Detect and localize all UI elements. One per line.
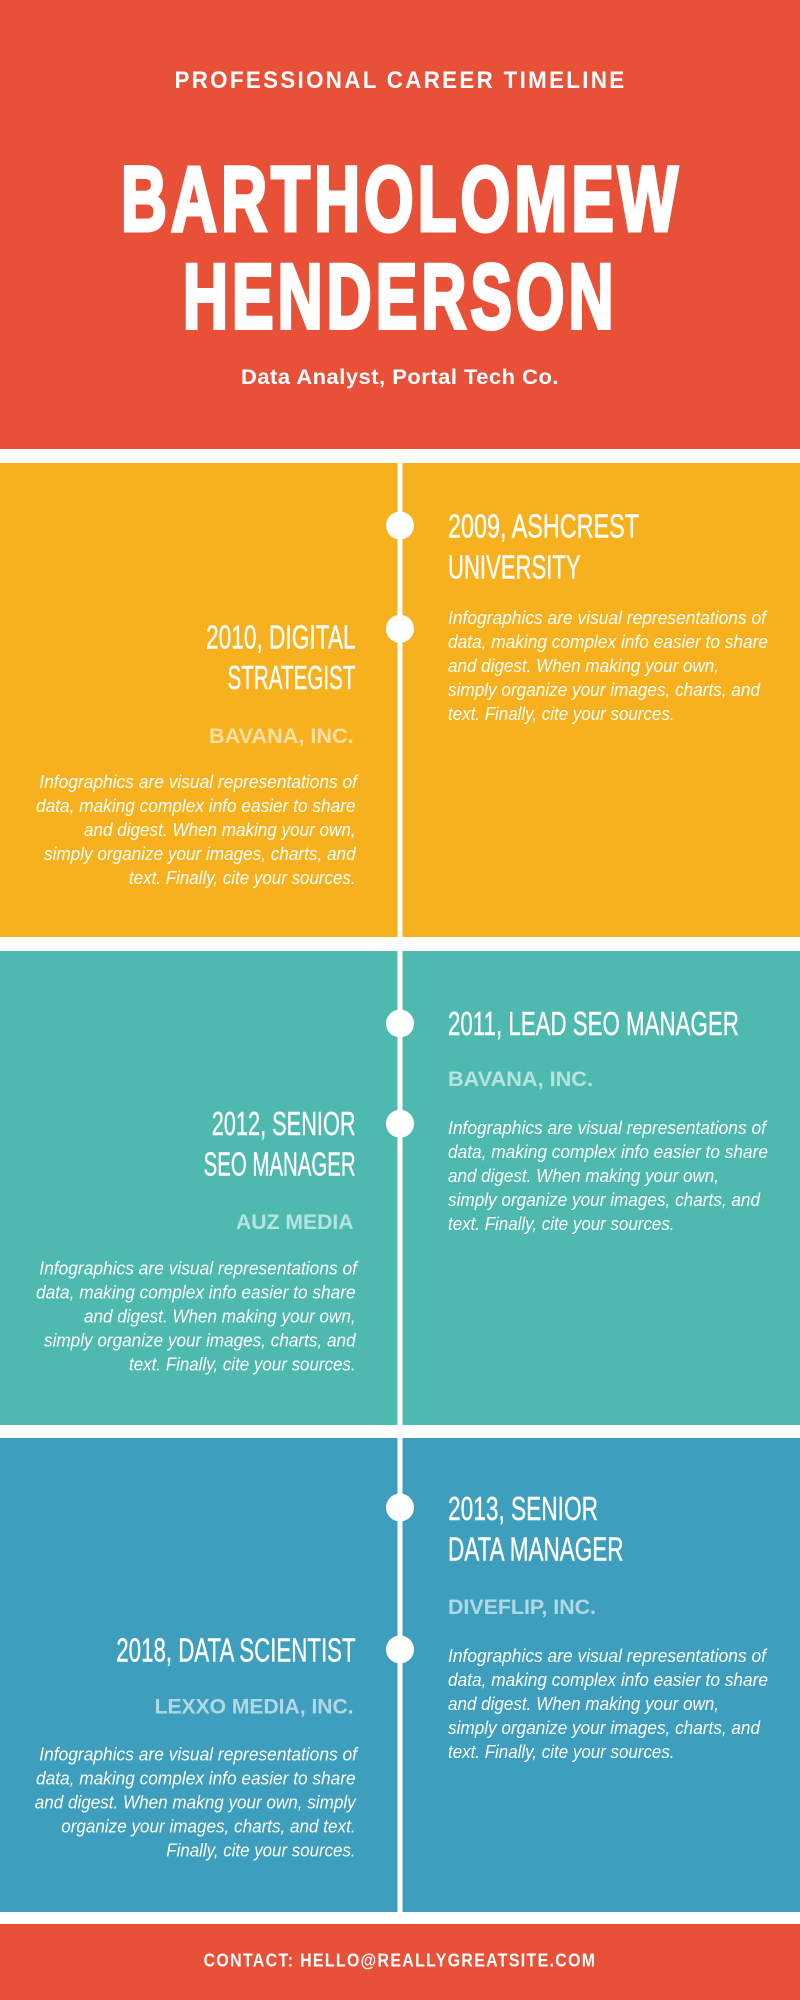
panel: teal timeline section bbox=[0, 951, 800, 1425]
entry: 2011 Lead SEO Manager: BAVANA, INC. bbox=[448, 1068, 593, 1091]
entry: 2010 Digital Strategist: and digest. When making your own, bbox=[84, 819, 356, 840]
entry: 2018 Data Scientist: organize your images, charts, and text. bbox=[61, 1815, 356, 1836]
entry: 2009 Ashcrest University: and digest. When making your own, bbox=[448, 655, 719, 676]
entry: 2009 Ashcrest University: text. Finally, cite your sources. bbox=[448, 703, 674, 724]
entry: 2013 Senior Data Manager: data, making complex info easier to share bbox=[448, 1669, 768, 1690]
entry: 2012 Senior SEO Manager bbox=[36, 1105, 359, 1374]
entry: 2013 Senior Data Manager: DIVEFLIP, INC. bbox=[448, 1596, 596, 1619]
entry: 2012 Senior SEO Manager: AUZ MEDIA bbox=[236, 1211, 354, 1234]
entry: 2011 Lead SEO Manager: simply organize your images, charts, and bbox=[448, 1189, 761, 1210]
entry: 2011 Lead SEO Manager bbox=[448, 1005, 768, 1234]
entry: 2012 Senior SEO Manager: and digest. When making your own, bbox=[84, 1305, 356, 1326]
entry: 2018 Data Scientist: LEXXO MEDIA, INC. bbox=[155, 1695, 354, 1718]
entry: 2013 Senior Data Manager: simply organize your images, charts, and bbox=[448, 1717, 761, 1738]
entry: 2009 Ashcrest University: simply organize your images, charts, and bbox=[448, 679, 761, 700]
header panel bbox=[0, 0, 800, 449]
entry: 2018 Data Scientist: Infographics are visual representations of bbox=[39, 1743, 359, 1764]
entry: 2018 Data Scientist: 2018, DATA SCIENTIST bbox=[116, 1632, 356, 1669]
entry: 2010 Digital Strategist: STRATEGIST bbox=[228, 659, 356, 696]
title bbox=[121, 149, 682, 348]
entry: 2010 Digital Strategist: 2010, DIGITAL bbox=[206, 618, 356, 655]
entry: 2011 Lead SEO Manager: data, making complex info easier to share bbox=[448, 1141, 768, 1162]
entry: 2013 Senior Data Manager bbox=[448, 1490, 768, 1762]
entry: 2010 Digital Strategist: data, making complex info easier to share bbox=[36, 795, 356, 816]
timeline line and dots bbox=[386, 463, 414, 1912]
entry: 2012 Senior SEO Manager: SEO MANAGER bbox=[204, 1145, 356, 1182]
subtitle: Data Analyst, Portal Tech Co. bbox=[241, 365, 559, 389]
entry: 2009 Ashcrest University bbox=[448, 508, 768, 724]
entry: 2009 Ashcrest University: Infographics are visual representations of bbox=[448, 607, 768, 628]
entry: 2013 Senior Data Manager: DATA MANAGER bbox=[448, 1530, 624, 1567]
entry: 2011 Lead SEO Manager: text. Finally, cite your sources. bbox=[448, 1213, 674, 1234]
entry: 2018 Data Scientist: and digest. When makng your own, simply bbox=[35, 1791, 357, 1812]
entry: 2012 Senior SEO Manager: simply organize your images, charts, and bbox=[44, 1329, 356, 1350]
entry: 2012 Senior SEO Manager: data, making complex info easier to share bbox=[36, 1281, 356, 1302]
entry: 2010 Digital Strategist: simply organize your images, charts, and bbox=[44, 843, 356, 864]
entry: 2009 Ashcrest University: data, making complex info easier to share bbox=[448, 631, 768, 652]
entry: 2012 Senior SEO Manager: 2012, SENIOR bbox=[212, 1105, 356, 1142]
entry: 2009 Ashcrest University: 2009, ASHCREST bbox=[448, 508, 639, 545]
entry: 2018 Data Scientist bbox=[35, 1632, 359, 1860]
entry: 2012 Senior SEO Manager: Infographics are visual representations of bbox=[39, 1257, 359, 1278]
entry: 2018 Data Scientist: Finally, cite your sources. bbox=[166, 1839, 356, 1860]
eyebrow heading: PROFESSIONAL CAREER TIMELINE bbox=[174, 67, 626, 94]
entry: 2010 Digital Strategist: text. Finally, cite your sources. bbox=[129, 867, 356, 888]
entry: 2010 Digital Strategist bbox=[36, 618, 359, 888]
contact line: CONTACT: HELLO@REALLYGREATSITE.COM bbox=[204, 1951, 596, 1971]
entry: 2013 Senior Data Manager: 2013, SENIOR bbox=[448, 1490, 598, 1527]
entry: 2013 Senior Data Manager: text. Finally, cite your sources. bbox=[448, 1741, 674, 1762]
footer panel bbox=[0, 1924, 800, 2000]
entry: 2011 Lead SEO Manager: Infographics are visual representations of bbox=[448, 1117, 768, 1138]
panel: yellow timeline section bbox=[0, 463, 800, 937]
entry: 2011 Lead SEO Manager: and digest. When making your own, bbox=[448, 1165, 719, 1186]
entry: 2009 Ashcrest University: UNIVERSITY bbox=[448, 548, 581, 585]
panel: blue timeline section bbox=[0, 1438, 800, 1912]
entry: 2012 Senior SEO Manager: text. Finally, cite your sources. bbox=[129, 1353, 356, 1374]
entry: 2010 Digital Strategist: Infographics are visual representations of bbox=[39, 771, 359, 792]
entry: 2013 Senior Data Manager: and digest. When making your own, bbox=[448, 1693, 719, 1714]
entry: 2018 Data Scientist: data, making complex info easier to share bbox=[36, 1767, 356, 1788]
entry: 2010 Digital Strategist: BAVANA, INC. bbox=[209, 725, 354, 748]
entry: 2013 Senior Data Manager: Infographics are visual representations of bbox=[448, 1645, 768, 1666]
